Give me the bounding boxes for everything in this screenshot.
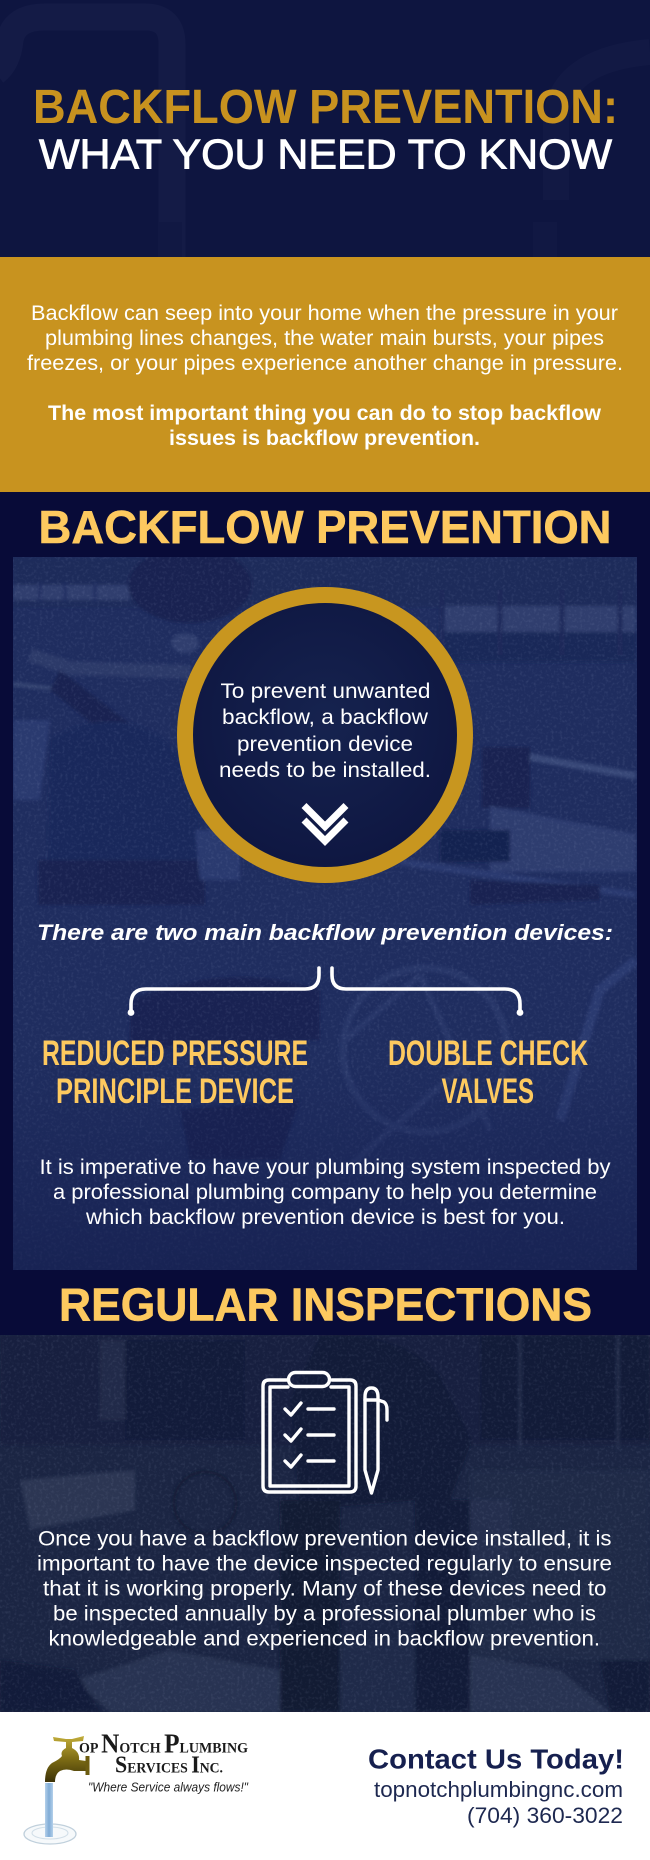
intro paragraph: plumbing lines changes, the water main bursts, your pipes: [45, 327, 604, 350]
icon: faucet with water: [24, 1736, 90, 1844]
paragraph: regular inspections: knowledgeable and experienced in backflow prevention.: [48, 1628, 600, 1650]
title: WHAT YOU NEED TO KNOW: [39, 130, 613, 178]
paragraph: regular inspections: that it is working properly. Many of these devices need to: [43, 1578, 606, 1600]
contact block: Contact Us Today!: [368, 1744, 624, 1774]
logo wordmark: OP NOTCH PLUMBING: [79, 1728, 248, 1758]
callout: circle: [185, 595, 465, 875]
contact block: topnotchplumbingnc.com: [374, 1777, 623, 1802]
paragraph: regular inspections: Once you have a backflow prevention device installed, it is: [38, 1528, 612, 1550]
paragraph: regular inspections: be inspected annually by a professional plumber who is: [53, 1602, 596, 1626]
header background with faint pipes: [0, 0, 650, 257]
intro paragraph: Backflow can seep into your home when the pressure in your: [31, 302, 618, 325]
panel: regular inspections photo: [0, 1334, 650, 1712]
device: reduced pressure principle device: PRINCIPLE DEVICE: [56, 1072, 294, 1111]
dark section background: [0, 492, 650, 1335]
intro bold statement: issues is backflow prevention.: [169, 427, 480, 450]
paragraph: regular inspections: important to have the device inspected regularly to ensure: [37, 1552, 612, 1576]
logo wordmark: [79, 1728, 249, 1794]
contact block: [368, 1744, 624, 1828]
panel: intro gold band: [0, 257, 650, 492]
circle text: To prevent unwanted: [220, 679, 430, 703]
contact block: (704) 360-3022: [467, 1803, 623, 1828]
title: BACKFLOW PREVENTION:: [33, 81, 618, 134]
intro paragraph: freezes, or your pipes experience another change in pressure.: [27, 352, 623, 375]
paragraph: inspection advice: It is imperative to have your plumbing system inspected by: [40, 1156, 611, 1179]
bracket connector: [129, 968, 522, 1014]
circle text: needs to be installed.: [219, 758, 431, 782]
paragraph: inspection advice: a professional plumbing company to help you determine: [53, 1181, 597, 1204]
device: double check valves: [388, 1034, 588, 1111]
logo: top notch plumbing: [24, 1728, 249, 1844]
device: reduced pressure principle device: REDUCED PRESSURE: [42, 1034, 308, 1073]
device: double check valves: VALVES: [442, 1072, 534, 1111]
intro bold statement: The most important thing you can do to stop backflow: [48, 402, 602, 425]
paragraph: inspection advice: [40, 1156, 611, 1229]
heading: regular inspections: REGULAR INSPECTIONS: [59, 1278, 592, 1330]
circle text: [219, 679, 431, 782]
footer panel: [0, 1712, 650, 1860]
circle text: prevention device: [237, 732, 413, 756]
paragraph: inspection advice: which backflow prevention device is best for you.: [85, 1206, 565, 1229]
device: reduced pressure principle device: [42, 1034, 308, 1111]
title: [33, 81, 618, 178]
intro bold statement: [48, 402, 602, 450]
logo wordmark: SERVICES INC.: [115, 1752, 223, 1778]
subheading: two devices: There are two main backflow prevention devices:: [37, 920, 613, 945]
icon: double chevron arrow: [304, 806, 346, 841]
panel: backflow prevention photo: [13, 547, 637, 1270]
logo wordmark: "Where Service always flows!": [88, 1780, 249, 1794]
heading: backflow prevention: BACKFLOW PREVENTION: [38, 501, 612, 553]
intro paragraph: [27, 302, 623, 375]
icon: clipboard and pen: [263, 1372, 387, 1493]
paragraph: regular inspections: [37, 1528, 612, 1650]
circle text: backflow, a backflow: [222, 705, 428, 729]
